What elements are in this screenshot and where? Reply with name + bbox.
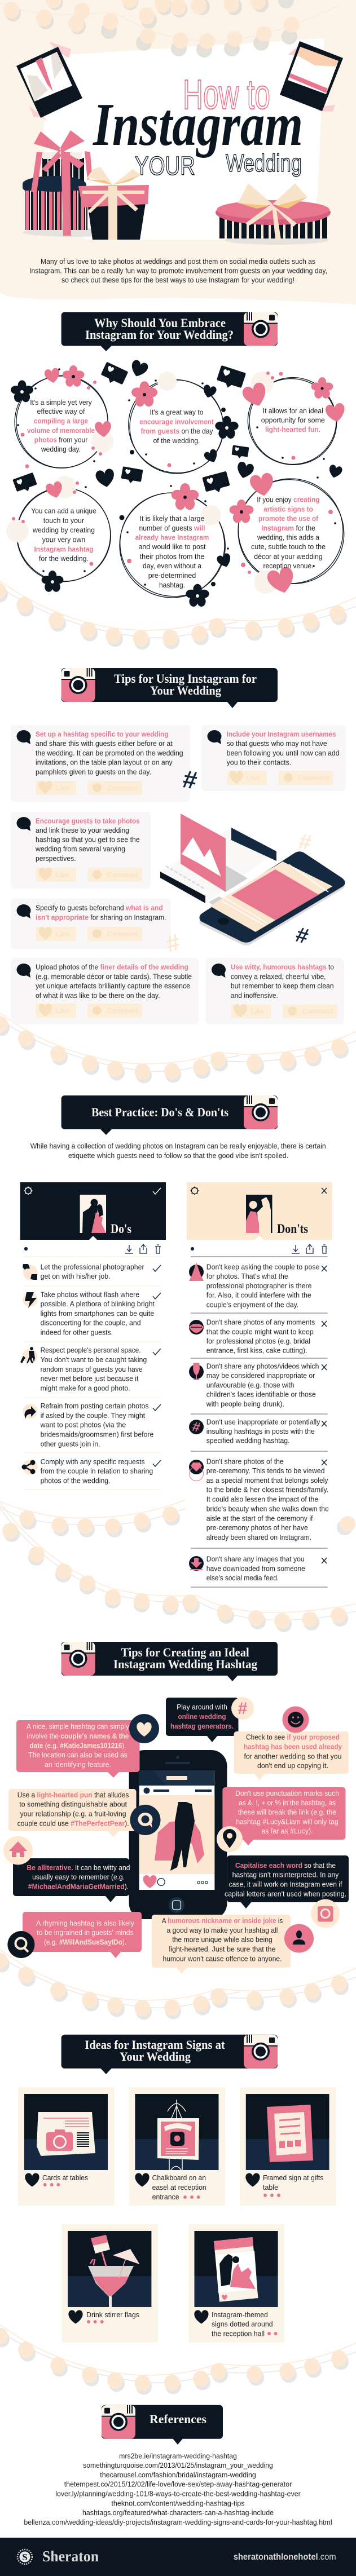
callout: capitalise: hashtag isn't misinterpreted. In any [232,1871,339,1879]
reference links: theknot.com/content/wedding-hashtag-tips [111,2499,245,2507]
don't item 6: else's social media feed. [206,1574,279,1582]
callout: couple's names [16,1714,159,1778]
polaroid: groom [16,42,82,121]
tip card 5: Comment [107,1006,138,1015]
reason text 1: It's a simple yet very [30,398,92,406]
tip card 5: Like [56,1006,69,1015]
hash icon: beige lower: # [163,929,183,957]
reason text 6: artistic signs to [263,505,313,513]
sign card: cards at tables: Cards at tables [42,2173,88,2182]
reason text 2 [139,408,214,445]
do item 5 [21,1457,161,1485]
callout: couple's names: an identifying feature. [45,1760,111,1769]
callout: capitalise: case, it will work on Instagram even if [229,1880,342,1888]
tip card 6: and inoffensive. [231,991,278,1000]
lantern garland 3 [0,1500,356,1632]
don't item 5: already been shared on Instagram. [206,1533,311,1541]
reason text 5: day, even without a [143,562,202,570]
reference links: thetempest.co/2015/12/02/life-love/love-sex/step-away-hashtag-generator [64,2480,292,2489]
don't item 1: for photos. That's what the [206,1272,288,1280]
tip card 1 [11,725,190,802]
callout: rhyming: A rhyming hashtag is also likely [36,1919,134,1927]
tip card 6: Comment [302,1007,333,1015]
reason text 5: It is likely that a large [140,514,204,523]
decorative hearts, flowers and tags [0,359,356,616]
reason text 3 [261,406,325,434]
do item 3: never met before just because it [41,1375,139,1383]
callout: punctuation [217,1787,345,1852]
don't item 5: aisle at the start of the ceremony if [206,1514,313,1522]
heading: best practice: Best Practice: Do's & Don'ts [91,1105,228,1119]
don't item 6: have downloaded from someone [206,1564,305,1572]
sheraton logo [17,2548,99,2565]
reason text 6 [251,495,326,570]
intro paragraph [29,257,327,284]
heading: why embrace [61,312,278,351]
title: YOUR [135,151,195,180]
tip card 3: Comment [107,871,138,879]
heading: why embrace: Why Should You Embrace [94,316,226,330]
tip card 5: Upload photos of the finer details of the wedding [36,963,188,971]
don't item 4 [189,1417,327,1445]
do item 3 [20,1346,161,1393]
reason text 4 [31,506,96,563]
tip card 1: invitations, on the table plan layout or on any [36,758,173,767]
tip card 1: the wedding. It can be promoted on the wedding [36,749,183,757]
reason text 4: You can add a unique [31,506,96,515]
do item 3: might make for a good photo. [41,1384,130,1393]
hash icon: navy: # [181,765,199,795]
callout: capitalise [225,1855,349,1928]
reason text 4: wedding by creating [32,525,95,534]
callout: rhyming: to be ingrained in guests' minds [37,1928,134,1937]
toolbar icons: don'ts [191,1244,327,1253]
don't item 2: Don't share photos of any moments [206,1318,315,1327]
sign card: drink stirrer [62,2224,158,2343]
reason text 6: reception venue. [263,562,314,570]
sign card: framed sign: table [263,2183,278,2191]
tip card 2: Include your Instagram usernames [227,730,336,739]
reason text 4: for the wedding. [39,554,89,563]
tip card 1: and share this with guests either before or at [36,739,173,748]
header background [0,0,356,304]
paper sheet [44,38,324,240]
callout: nickname: humour won't cause offence to anyone. [163,1954,282,1963]
heading: tips for using [61,668,278,708]
sheraton logo: Sheraton [42,2548,99,2565]
callout: check if used [234,1706,349,1780]
do item 4: other guests join in. [41,1439,100,1448]
title: Instagram [92,91,303,158]
heading: ideal hashtag: Tips for Creating an Ideal [121,1645,249,1659]
tip card 3: wedding from several varying [35,845,125,853]
sign card: themed signs [188,2224,284,2343]
polaroid: bride [280,41,343,112]
callout: couple's names: involve the couple's names & the [27,1732,129,1740]
don't item 5: pre-ceremony photos of her have [206,1523,308,1532]
don't item 2: that the couple might want to keep [206,1327,314,1336]
callout: check if used: for another wedding so that you [244,1752,342,1760]
tip card 5 [11,958,199,1024]
sign card: framed sign [240,2087,336,2206]
do item 2: lights from smartphones can be quite [41,1309,154,1318]
reason text 5: their photos from the [140,553,204,560]
do item 1: Let the professional photographer [41,1262,144,1271]
reason text 3: light-hearted fun. [265,425,320,434]
reason text 3: It allows for an ideal [263,406,323,415]
callout: nickname: A humorous nickname or inside joke is [162,1916,283,1925]
don't item 5 [189,1457,329,1541]
don't item 4: Don't use inappropriate or potentially [206,1417,320,1426]
don't item 4: insulting hashtags in posts with the [206,1427,315,1435]
gifts: left stack [23,130,124,237]
callout: light-hearted pun [8,1789,160,1837]
tip card 4: Like [56,930,69,938]
do's dividers [24,1257,161,1490]
tip card 5: of what it was like to be there on the day. [36,991,160,1000]
callout: punctuation: Don't use punctuation marks such [235,1789,339,1797]
heading: signs [61,2035,278,2074]
reason text 1: effective way of [37,407,85,416]
etiquette paragraph: etiquette which guests need to follow so that the good vibe isn't spoiled. [68,1151,288,1160]
callout: couple's names: The location can also be used as [28,1751,128,1759]
reason text 4: touch to your [43,516,85,524]
tip card 1: Comment [107,784,138,792]
do item 4: bridesmaids/groomsmen) first before [41,1430,153,1438]
reason text 5: number of guests will [139,524,205,532]
don't item 3: with people being drunk). [206,1400,284,1408]
hash icon: navy lower: # [293,923,311,949]
callout: rhyming [7,1912,142,1958]
hash icon: beige upper: # [297,829,313,855]
tip card 5: yet unique artefacts brilliantly capture the essence [36,982,190,990]
don'ts dividers [191,1257,328,1587]
reference links: somethingturquoise.com/2013/01/25/instagram_your_wedding [83,2461,273,2469]
reason text 2: It's a great way to [150,408,203,416]
tip card 3: perspectives. [36,854,76,863]
tip card 1: Like [56,784,69,792]
central phone illustration [129,1750,227,1919]
tip card 3: and link these to your wedding [36,826,129,834]
callout: nickname: the more unique while also being [172,1936,273,1944]
callout: check if used: Check to see if your proposed [246,1733,340,1742]
sign card: chalkboard: entrance [152,2193,179,2201]
do item 1: get on with his/her job. [41,1272,111,1280]
callout: check if used: hashtag has been used already [244,1742,342,1751]
lantern garland 1 [0,580,356,649]
don't item 2: entrance, first kiss, cake cutting). [206,1346,307,1355]
callout: punctuation: as &, !, + or % in the hashtag, as [239,1799,336,1807]
reason text 4: Instagram hashtag [34,545,94,554]
reason text 4: your very own [42,536,85,544]
heading: tips for using: Tips for Using Instagram for [114,671,257,686]
reason text 1: volume of memorable [27,426,95,435]
callout: capitalise: Capitalise each word so that the [235,1861,336,1870]
heading: signs: Your Wedding [120,2049,191,2064]
heading: best practice [61,1095,278,1135]
sign card: framed sign: Framed sign at gifts [263,2173,324,2182]
toolbar icons: do's [25,1244,161,1253]
reason text 5: already have Instagram [135,533,209,541]
panel: don'ts header: Don'ts [277,1222,308,1236]
do item 4: if asked by the couple. They might [41,1411,145,1420]
tip card 4: Specify to guests beforehand what is and [36,903,163,912]
panel: do's header: Do's [111,1222,131,1236]
header lanterns [0,0,339,58]
callout: online generators: online wedding [178,1712,226,1721]
tip card 6 [206,958,344,1024]
don't item 1: couple's enjoyment of the day. [206,1301,298,1309]
don't item 6 [189,1555,327,1582]
reason text 5: hashtag. [159,581,185,589]
don't item 3: may be considered inappropriate or [206,1371,315,1380]
callout: punctuation: as far as #Lucy). [262,1827,313,1835]
callout: online generators: # [238,1699,248,1718]
callout: alliterative: Be alliterative. It can be witty and [27,1863,130,1872]
do item 3: You don't want to be caught taking [41,1355,147,1364]
tip card 3: Encourage guests to take photos [36,816,140,825]
callout: light-hearted pun: your relationship (e.g. a fruit-loving [20,1810,126,1818]
do item 2: Take photos without flash where [41,1290,139,1298]
etiquette paragraph [30,1142,326,1160]
callout: nickname [152,1915,314,1974]
intro paragraph: Instagram. This can be a really fun way to promote involvement from guests on your wedding day, [29,266,327,275]
callout: online generators: hashtag generators. [170,1722,234,1730]
sign card: themed signs: Instagram-themed [212,2310,268,2319]
callout: online generators: Play around with [177,1703,227,1711]
tip card 2: you to their contacts. [227,758,291,767]
do item 5: photos of the wedding. [41,1477,111,1485]
reference links: bellenza.com/wedding-ideas/diy-projects/instagram-wedding-signs-and-cards-for-your-hashtag.html [24,2518,332,2526]
don't item 4: specified wedding hashtag. [206,1437,290,1445]
tip card 3: Like [56,871,69,879]
don't item 1: for. Also, it could interfere with the [206,1291,311,1300]
tip card 4: Comment [107,930,138,938]
heading: references [102,2405,223,2445]
reason text 6: If you enjoy creating [257,495,320,504]
callout: check if used: don't end up copying it. [257,1761,328,1770]
don't item 5: bride's beauty when she walks down the [206,1504,329,1513]
do item 5: from the couple in relation to sharing [41,1467,153,1475]
do item 2: disconcerting for the couple, and [41,1319,141,1327]
intro paragraph: so check out these tips for the best ways to use Instagram for your wedding! [61,276,295,284]
do item 3: random snaps of guests you have [41,1365,143,1373]
callout: couple's names: date (e.g. #KatieJames101216). [30,1741,126,1749]
do item 2: indeed for other guests. [41,1328,113,1337]
callout: light-hearted pun: Use a light-hearted pun that alludes [17,1791,129,1799]
don't item 1: Don't keep asking the couple to pose [206,1262,319,1271]
callout: light-hearted pun: couple could use #ThePerfectPear). [17,1819,129,1827]
callout: alliterative: usually easy to remember (e.g. [32,1873,125,1881]
reference links: thecarousel.com/fashion/bridal/instagram-wedding [100,2471,256,2479]
reason text 2: from guests on the day [141,427,213,435]
callout: capitalise: capital letters aren't used when posting. [225,1889,346,1898]
callout: alliterative [3,1836,130,1902]
tip card 4: isn't appropriate for sharing on Instagram. [36,913,166,921]
reason text 6: wedding, this adds a [257,533,320,541]
reason text 3: opportunity for some [261,416,325,424]
reason text 1: photos from your [34,435,88,444]
reference links: hashtags.org/featured/what-characters-can-a-hashtag-include [82,2508,274,2517]
footer: sheratonathlonehotel.com [234,2552,336,2562]
heading: signs: Ideas for Instagram Signs at [85,2038,225,2052]
heading: tips for using: Your Wedding [150,683,221,697]
reference links: lover.ly/planning/wedding-101/8-ways-to-create-the-best-wedding-hashtag-ever [55,2490,301,2498]
tip card 2: been following you until now can add [227,749,340,757]
title [92,71,303,180]
reason text 1: wedding day. [41,445,81,453]
sign card: cards at tables [18,2087,115,2206]
reason text 2: encourage involvement [139,417,214,426]
sign card: drink stirrer: Drink stirrer flags [86,2310,139,2319]
panel: do's header [20,1182,166,1240]
tip card 2: so that guests who may not have [227,739,327,748]
reason text 6: cute, subtle touch to the [251,542,326,551]
tip card 6: convey a relaxed, cheerful vibe, [231,972,326,981]
callout: rhyming: (e.g. #WillAndSueSayIDo). [44,1938,126,1946]
don't item 5: to the bride & her closest friends/family. [206,1486,328,1494]
don't item 5: pre-ceremony. This tends to be viewed [206,1466,325,1475]
reason text 6: décor at your wedding [254,553,323,560]
reason text 5: and would like to post [139,542,206,551]
don't item 3: Don't share any photos/videos which [206,1362,319,1370]
don't item 3 [189,1362,327,1408]
reason text 6: promote the use of [258,514,319,523]
sign card: themed signs: signs dotted around [212,2320,273,2328]
callout: alliterative: #MichaelAndMariaGetMarried). [28,1882,129,1890]
reference links [24,2451,332,2526]
tip card 1: pamphlets given to guests on the day. [36,768,151,776]
do item 2: possible. A plethora of blinking bright [41,1300,155,1308]
sign card: chalkboard [129,2087,225,2206]
callout: punctuation: these will break the link (e.g. the [238,1808,336,1817]
don't item 2: for professional photos (e.g. bridal [206,1337,310,1345]
do item 4: want to post photos (via the [40,1421,126,1429]
tip card 6: Use witty, humorous hashtags to [231,963,334,971]
don't item 2 [189,1318,327,1355]
lantern garland 2 [0,1013,356,1084]
panel: don'ts header [187,1182,332,1240]
reason text 5: pre-determined [148,571,196,580]
heading: ideal hashtag [61,1642,278,1681]
heading: references: References [150,2412,206,2426]
footer [0,2538,356,2576]
don't item 3: unfavourable (e.g. those with [206,1381,295,1389]
tip card 3 [11,812,151,889]
sign card: chalkboard: Chalkboard on an [152,2173,206,2182]
heading: why embrace: Instagram for Your Wedding? [85,328,234,342]
reason text 2: of the wedding. [153,436,200,445]
lantern garland 4 [0,1950,356,2020]
don't item 5: as a special moment that belongs solely [206,1476,328,1484]
callout: punctuation: hashtag #Lucy&Liam will only tag [236,1818,339,1826]
do item 3: Respect people's personal space. [41,1346,141,1354]
title: How to [183,71,270,118]
do item 5: Comply with any specific requests [41,1457,145,1466]
reason text 6: Instagram for the [261,524,315,532]
do item 1 [23,1262,161,1280]
tip card 6: Like [250,1007,264,1015]
title: Wedding [226,149,302,177]
intro paragraph: Many of us love to take photos at weddings and post them on social media outlets such as [41,257,315,266]
don't item 6: Don't share any images that you [206,1555,305,1563]
tip card 1: Set up a hashtag specific to your wedding [36,730,168,739]
callout: couple's names: A nice, simple hashtag can simply [27,1722,129,1731]
callout: nickname: a good way to make your hashtag all [167,1926,278,1934]
don't item 1: professional photographer is there [206,1282,311,1290]
reason text 1: compiling a large [34,417,88,425]
sign card: themed signs: the reception hall [212,2330,265,2338]
gifts: right round box [216,183,331,245]
tip card 2 [201,725,346,791]
do item 2 [23,1290,161,1337]
don't item 3: children's faces identifiable or those [206,1390,316,1399]
etiquette paragraph: While having a collection of wedding photos on Instagram can be really enjoyable, there is certain [30,1142,326,1150]
don't item 1 [189,1262,327,1309]
do item 4 [23,1402,161,1448]
tip card 5: (e.g. memorable décor or table cards). These subtle [36,972,192,981]
gifts: front box [78,167,149,240]
callout: nickname: light-hearted. Just be sure that the [169,1945,275,1953]
tip card 3: hashtag so that you get to see the [36,836,140,843]
do item 4: Refrain from posting certain photos [41,1402,149,1410]
sheraton logo: S [22,2552,28,2562]
tip card 2: Comment [298,774,329,782]
reason text 5 [135,514,209,589]
heading: ideal hashtag: Instagram Wedding Hashtag [113,1657,257,1671]
tip card 2: Like [247,774,260,782]
callout: online generators [166,1697,254,1742]
don't item 5: It could also lessen the impact of the [206,1495,318,1504]
don't item 4: # [191,1419,201,1435]
reason text 1 [27,398,95,453]
tip card 4 [11,899,171,949]
lantern garland 5 [0,2325,356,2395]
callout: light-hearted pun: to something distinguishable about [19,1800,127,1809]
reference links: mrs2be.ie/instagram-wedding-hashtag [119,2451,237,2460]
isometric phone illustration [160,814,345,945]
tip card 6: but remember to keep them clean [231,982,334,990]
don't item 5: Don't share photos of the [206,1457,284,1465]
sign card: chalkboard: easel at reception [152,2183,206,2191]
